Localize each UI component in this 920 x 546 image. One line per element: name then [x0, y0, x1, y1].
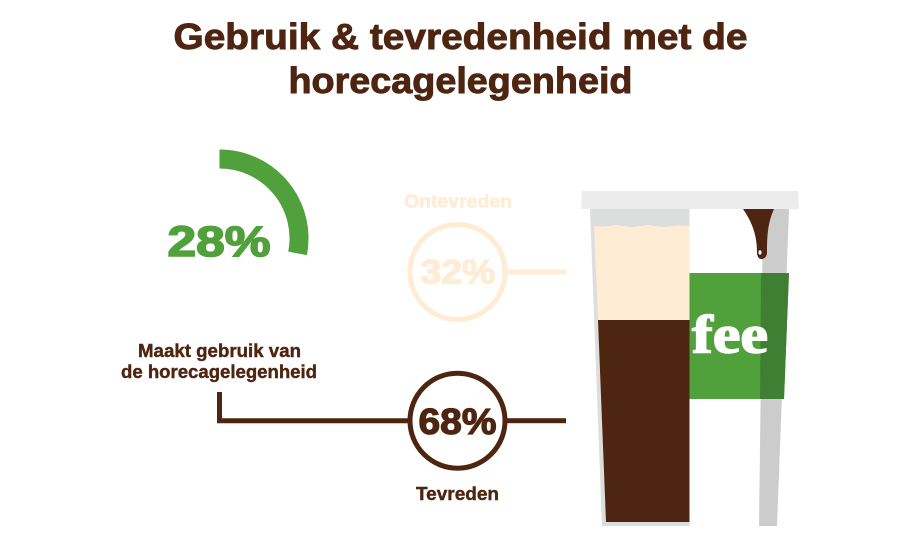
cup right wall [759, 209, 789, 526]
cup left half [590, 209, 690, 526]
drip highlight [758, 250, 762, 255]
icon: coffee cup [581, 191, 799, 526]
callout: Tevreden 68%: Tevreden [416, 484, 499, 504]
title [174, 16, 748, 101]
callout: Ontevreden 32%: Ontevreden [404, 192, 512, 212]
callout: Maakt gebruik van de horecagelegenheid: Maakt gebruik van [138, 341, 301, 361]
lid [581, 191, 799, 209]
coffee layer [598, 320, 690, 522]
cream layer [594, 225, 690, 320]
coffee drip [743, 209, 774, 259]
callout: Ontevreden 32% [404, 192, 566, 320]
title: Gebruik & tevredenheid met de [174, 16, 748, 57]
title: horecagelegenheid [288, 60, 632, 101]
value: 28%: 28% [168, 218, 270, 266]
chart: 28% arc gauge [168, 159, 299, 266]
sleeve text: fee: fee [692, 304, 768, 364]
connector line [220, 392, 408, 421]
callout: Ontevreden 32%: 32% [420, 254, 496, 292]
sleeve band [690, 273, 789, 399]
sleeve shadow [760, 273, 789, 399]
callout: Maakt gebruik van de horecagelegenheid [121, 341, 317, 382]
callout: Tevreden 68% [410, 373, 566, 504]
callout: Tevreden 68%: 68% [418, 401, 496, 442]
callout: Maakt gebruik van de horecagelegenheid: de horecagelegenheid [121, 362, 317, 382]
